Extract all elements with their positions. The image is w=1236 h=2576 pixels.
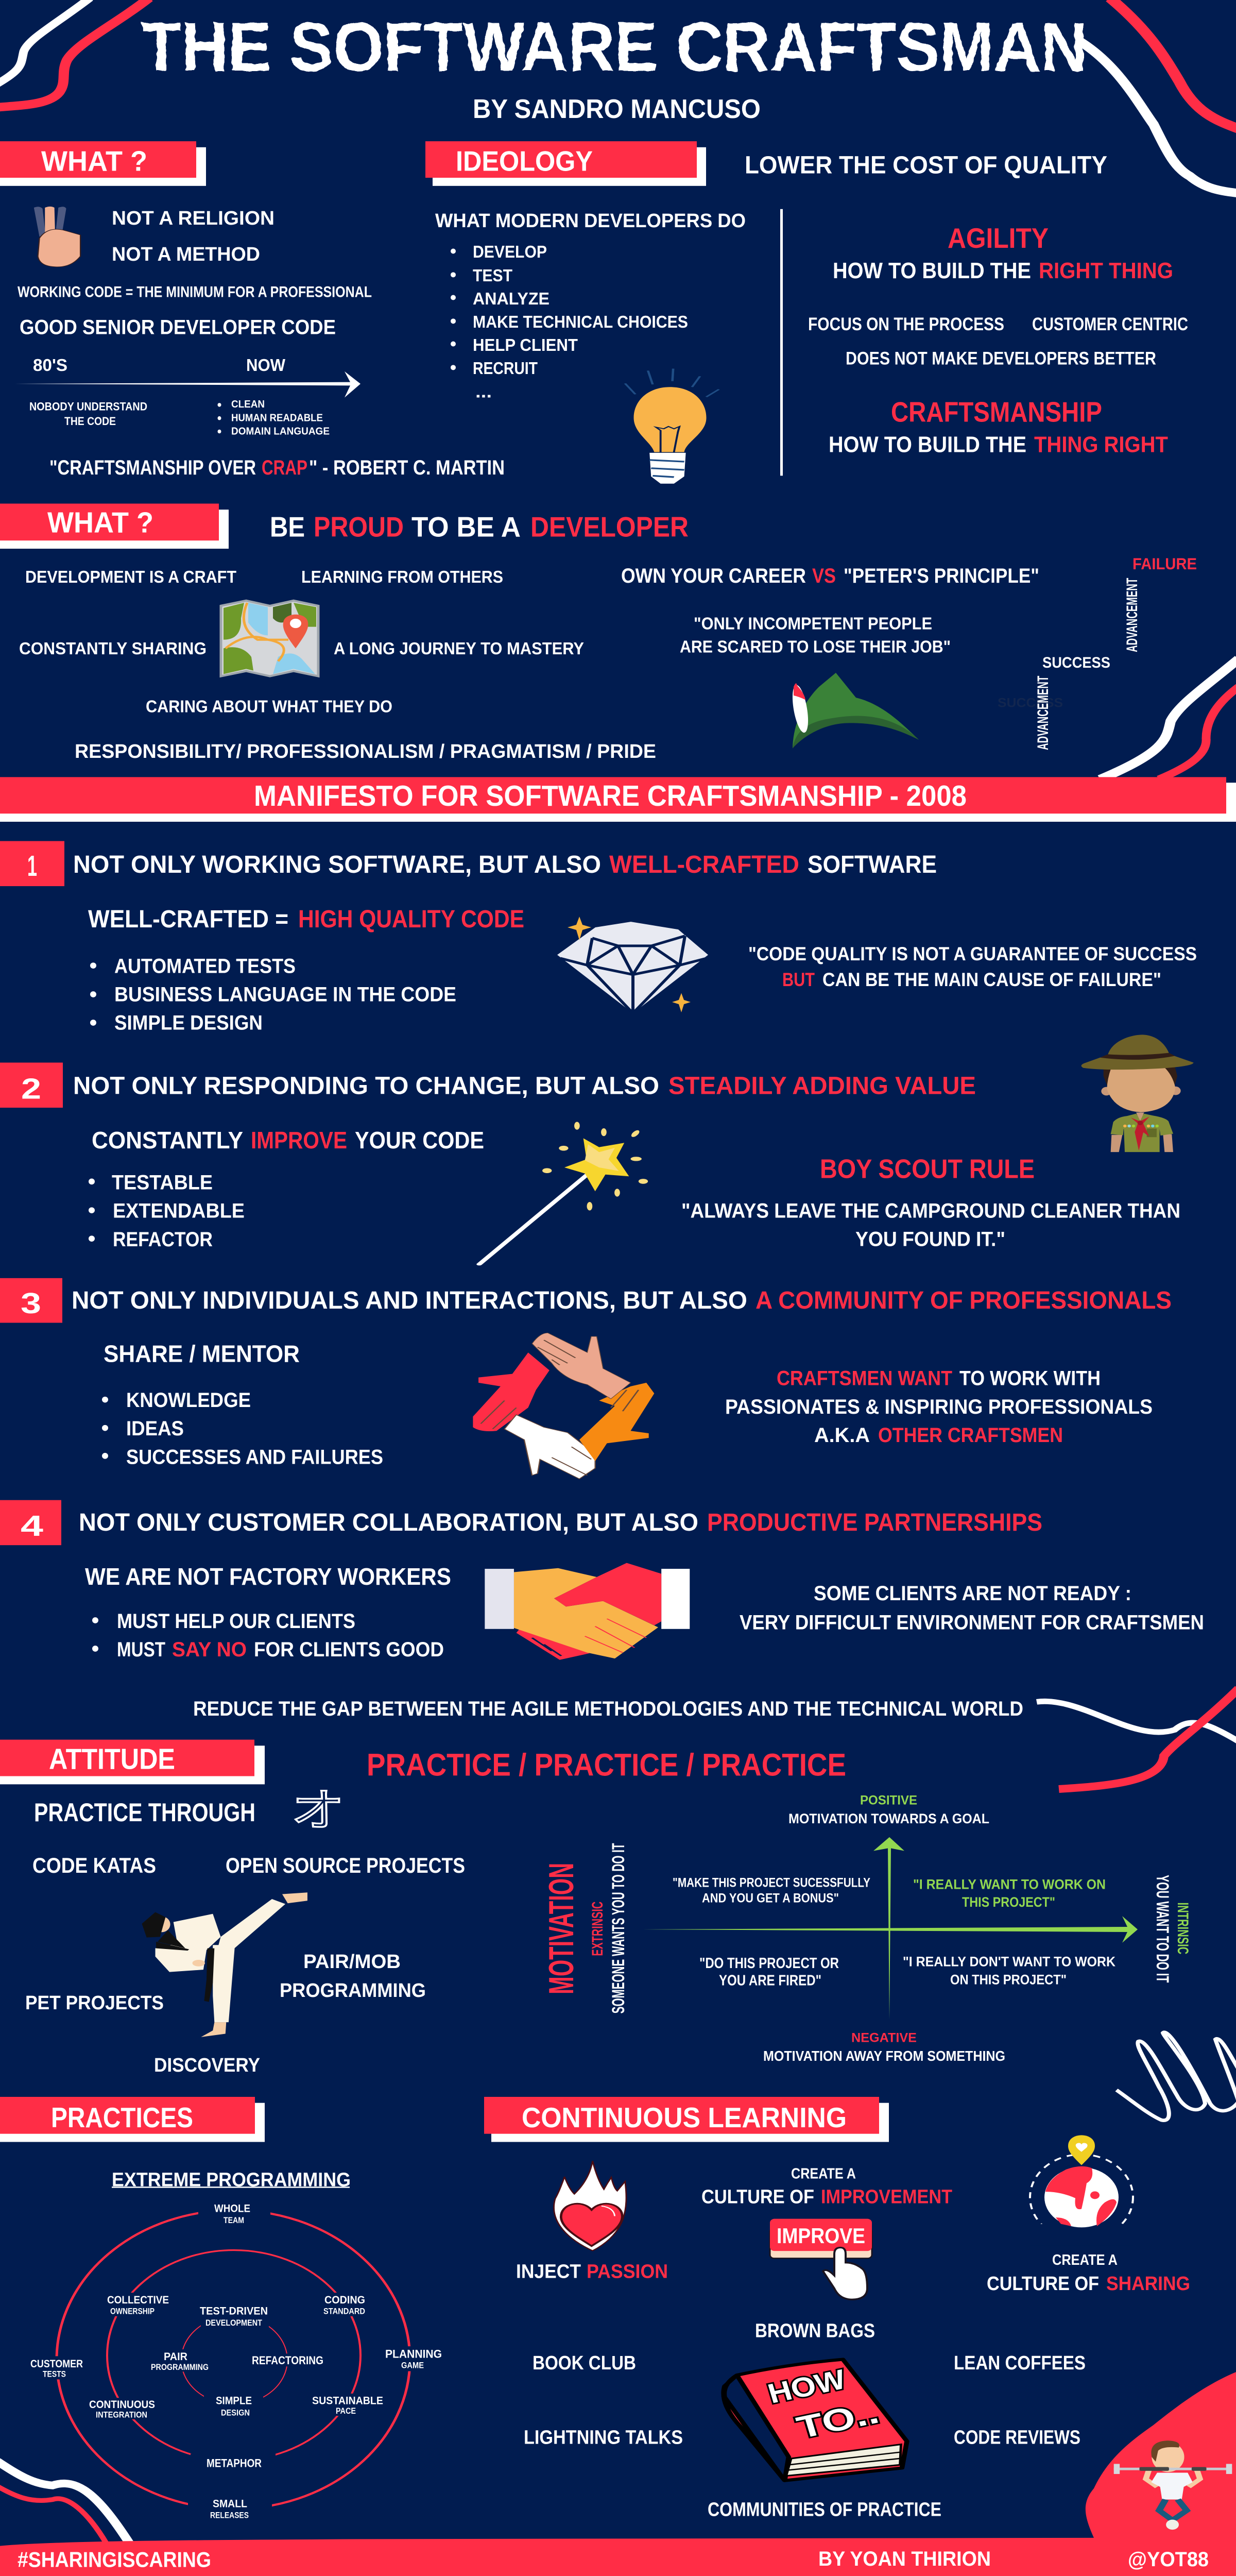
text: handle: @YOT88 bbox=[1128, 2548, 1209, 2571]
text: inject passion bbox=[516, 2260, 668, 2282]
subheading: high quality code: HIGH QUALITY CODE bbox=[298, 905, 524, 933]
quadrant: extrinsic positive: "MAKE THIS PROJECT SUCESSFULLY bbox=[673, 1875, 870, 1890]
label: collective ownership: COLLECTIVE bbox=[107, 2294, 169, 2306]
banner: manifesto: MANIFESTO FOR SOFTWARE CRAFTSMANSHIP - 2008 bbox=[254, 779, 967, 812]
quote: campground: YOU FOUND IT." bbox=[855, 1228, 1005, 1250]
heading: steadily adding value: NOT ONLY RESPONDING TO CHANGE, BUT ALSO bbox=[73, 1072, 659, 1099]
axis label: positive: POSITIVE bbox=[860, 1793, 917, 1807]
section 1 bbox=[0, 841, 1197, 1034]
icon: improve button bbox=[770, 2219, 872, 2299]
text: book club: BOOK CLUB bbox=[533, 2352, 636, 2374]
list: improve bbox=[89, 1171, 245, 1251]
text: working code: WORKING CODE = THE MINIMUM FOR A PROFESSIONAL bbox=[18, 283, 372, 300]
heading: attitude: ATTITUDE bbox=[49, 1743, 175, 1775]
quote: incompetent people: ARE SCARED TO LOSE THEIR JOB" bbox=[680, 637, 951, 656]
text: craftsmen want: TO WORK WITH bbox=[959, 1367, 1101, 1389]
heading: ideology bbox=[425, 141, 706, 186]
text: culture of sharing: CULTURE OF bbox=[987, 2273, 1099, 2294]
rings bbox=[57, 2210, 410, 2509]
heading: well-crafted software: NOT ONLY WORKING SOFTWARE, BUT ALSO bbox=[73, 851, 601, 878]
icon: author avatar bbox=[1114, 2441, 1232, 2530]
section 2 bbox=[0, 1035, 1194, 1264]
label: test-driven development bbox=[200, 2304, 268, 2328]
axis label: negative bbox=[763, 2030, 1005, 2064]
list: developer activities: TEST bbox=[473, 266, 512, 285]
chart: peter's principle: ADVANCEMENT bbox=[1034, 676, 1052, 750]
chart: xp circles bbox=[28, 2200, 443, 2522]
label: sustainable pace: PACE bbox=[336, 2406, 356, 2416]
heading: productive partnerships: PRODUCTIVE PARTNERSHIPS bbox=[707, 1509, 1042, 1536]
heading: be proud to be a developer: DEVELOPER bbox=[530, 511, 689, 543]
text: focus on the process: FOCUS ON THE PROCESS bbox=[808, 314, 1004, 334]
number 3: 3 bbox=[21, 1287, 41, 1320]
list: developer activities: MAKE TECHNICAL CHOICES bbox=[473, 312, 688, 331]
label: coding standard: STANDARD bbox=[323, 2306, 365, 2316]
axis label: negative: MOTIVATION AWAY FROM SOMETHING bbox=[763, 2048, 1005, 2064]
text: open source projects: OPEN SOURCE PROJECTS bbox=[226, 1853, 465, 1877]
icon: katakana o: オ bbox=[291, 1774, 345, 1839]
quote: campground bbox=[681, 1199, 1180, 1250]
label: simple design: SIMPLE bbox=[216, 2395, 252, 2407]
quadrant: extrinsic negative: "DO THIS PROJECT OR bbox=[699, 1955, 839, 1971]
quote: code quality: BUT bbox=[782, 969, 815, 990]
text: craftsmen want: CRAFTSMEN WANT bbox=[777, 1367, 952, 1389]
icon: flaming heart bbox=[554, 2161, 626, 2251]
list: improve: EXTENDABLE bbox=[113, 1199, 245, 1222]
icon: improve button: IMPROVE bbox=[777, 2224, 865, 2248]
label: sustainable pace: SUSTAINABLE bbox=[312, 2395, 383, 2407]
text: culture of improvement: CULTURE OF bbox=[701, 2185, 814, 2208]
label: customer tests: TESTS bbox=[43, 2369, 66, 2379]
timeline: THE CODE bbox=[64, 415, 116, 428]
heading: community of professionals: NOT ONLY INDIVIDUALS AND INTERACTIONS, BUT ALSO bbox=[72, 1286, 747, 1314]
text: author: BY YOAN THIRION bbox=[818, 2548, 991, 2570]
axis labels: intrinsic: YOU WANT TO DO IT bbox=[1153, 1875, 1172, 1982]
panel: be proud bbox=[0, 504, 1197, 762]
icon: peace hand bbox=[34, 207, 80, 267]
chart: peter's principle bbox=[998, 555, 1197, 750]
quadrant: extrinsic negative: YOU ARE FIRED" bbox=[719, 1972, 821, 1989]
list: share: KNOWLEDGE bbox=[126, 1389, 251, 1412]
heading: own your career bbox=[621, 565, 1039, 587]
block: agility: AGILITY bbox=[948, 222, 1049, 254]
text: lightning talks: LIGHTNING TALKS bbox=[524, 2426, 683, 2448]
quadrant: intrinsic positive: "I REALLY WANT TO WORK ON bbox=[913, 1877, 1106, 1892]
subtitle: BY SANDRO MANCUSO bbox=[473, 94, 761, 124]
number 2 bbox=[0, 1062, 63, 1108]
heading: extreme programming: EXTREME PROGRAMMING bbox=[112, 2168, 351, 2190]
text: brown bags: BROWN BAGS bbox=[755, 2319, 875, 2342]
number 4: 4 bbox=[21, 1510, 43, 1543]
chart: peter's principle: SUCCESS bbox=[998, 696, 1063, 710]
text: code reviews: CODE REVIEWS bbox=[954, 2426, 1080, 2448]
block: craftsmanship: HOW TO BUILD THE bbox=[829, 432, 1026, 457]
text: what modern developers do: WHAT MODERN DEVELOPERS DO bbox=[435, 209, 746, 231]
list: developer activities: ANALYZE bbox=[473, 289, 550, 308]
section 3 bbox=[0, 1278, 1172, 1479]
text: inject passion: INJECT bbox=[516, 2260, 581, 2282]
label: coding standard bbox=[323, 2294, 365, 2316]
list: developer activities bbox=[451, 242, 688, 401]
text: some clients: SOME CLIENTS ARE NOT READY : bbox=[814, 1582, 1131, 1605]
label: test-driven development: DEVELOPMENT bbox=[205, 2318, 263, 2328]
list: well-crafted: SIMPLE DESIGN bbox=[114, 1011, 263, 1034]
heading: be proud to be a developer bbox=[270, 511, 689, 543]
quadrant: intrinsic negative: ON THIS PROJECT" bbox=[950, 1972, 1067, 1988]
timeline: CLEAN bbox=[231, 398, 265, 410]
label: small releases bbox=[210, 2498, 249, 2520]
list: improve: TESTABLE bbox=[112, 1171, 213, 1194]
quote: incompetent people: "ONLY INCOMPETENT PEOPLE bbox=[694, 614, 932, 633]
label: simple design bbox=[216, 2395, 252, 2417]
text: communities of practice: COMMUNITIES OF PRACTICE bbox=[708, 2498, 941, 2520]
quadrant: intrinsic negative bbox=[903, 1954, 1115, 1988]
panel: practices bbox=[0, 2097, 443, 2522]
heading: what bbox=[0, 504, 229, 549]
panel: attitude bbox=[0, 1740, 1192, 2076]
number 3 bbox=[0, 1278, 62, 1323]
label: pair programming bbox=[151, 2350, 209, 2372]
subheading: constantly improve: YOUR CODE bbox=[355, 1127, 484, 1154]
list: developer activities: HELP CLIENT bbox=[473, 335, 578, 354]
label: continuous integration: CONTINUOUS bbox=[89, 2398, 155, 2411]
text: not a religion: NOT A RELIGION bbox=[112, 207, 274, 229]
subheading: constantly improve bbox=[92, 1127, 484, 1154]
list: clients bbox=[92, 1610, 444, 1661]
quadrant: extrinsic positive: AND YOU GET A BONUS" bbox=[702, 1891, 839, 1905]
arrow: timeline bbox=[14, 371, 360, 398]
heading: continuous learning bbox=[484, 2097, 889, 2142]
quote: craftsmanship over crap: "CRAFTSMANSHIP OVER bbox=[49, 456, 256, 479]
label: whole team: WHOLE bbox=[214, 2202, 250, 2215]
text: some clients bbox=[740, 1582, 1204, 1634]
text: good senior developer code: GOOD SENIOR DEVELOPER CODE bbox=[20, 316, 336, 338]
label: refactoring: REFACTORING bbox=[252, 2354, 323, 2367]
panel: what bbox=[0, 141, 505, 479]
timeline: NOBODY UNDERSTAND bbox=[29, 401, 147, 413]
heading: be proud to be a developer: PROUD bbox=[314, 511, 404, 543]
label: planning game: GAME bbox=[401, 2360, 424, 2370]
quadrant: intrinsic negative: "I REALLY DON'T WANT TO WORK bbox=[903, 1954, 1115, 1970]
heading: what bbox=[0, 141, 206, 186]
text: craftsmen want bbox=[725, 1367, 1153, 1447]
label: metaphor: METAPHOR bbox=[207, 2457, 262, 2470]
heading: boy scout rule: BOY SCOUT RULE bbox=[820, 1154, 1035, 1184]
icon: karate figure bbox=[142, 1892, 307, 2037]
label: simple design: DESIGN bbox=[221, 2408, 250, 2417]
list: developer activities: ... bbox=[475, 382, 492, 401]
block: agility: HOW TO BUILD THE bbox=[833, 259, 1031, 283]
heading: what: WHAT ? bbox=[47, 506, 153, 539]
heading: practices bbox=[0, 2097, 265, 2142]
list: clients: SAY NO bbox=[172, 1638, 247, 1661]
axis labels: intrinsic bbox=[1153, 1875, 1192, 1982]
subheading: high quality code: WELL-CRAFTED = bbox=[88, 905, 288, 933]
number 4 bbox=[0, 1500, 61, 1545]
label: planning game: PLANNING bbox=[385, 2348, 442, 2361]
text: pair/mob programming: PAIR/MOB bbox=[303, 1951, 401, 1972]
text: development is a craft: DEVELOPMENT IS A CRAFT bbox=[25, 567, 236, 586]
list: well-crafted: AUTOMATED TESTS bbox=[114, 955, 296, 977]
heading: continuous learning: CONTINUOUS LEARNING bbox=[522, 2102, 847, 2133]
block: agility bbox=[833, 222, 1173, 283]
axis labels: extrinsic bbox=[542, 1843, 628, 2013]
quadrant: intrinsic positive: THIS PROJECT" bbox=[962, 1894, 1055, 1910]
icon: diamond bbox=[557, 917, 708, 1013]
list: developer activities: RECRUIT bbox=[473, 359, 538, 378]
icon: globe bbox=[1030, 2135, 1133, 2245]
heading: own your career: "PETER'S PRINCIPLE" bbox=[844, 565, 1039, 587]
list: clients: FOR CLIENTS GOOD bbox=[254, 1638, 444, 1661]
icon: magic wand bbox=[479, 1122, 648, 1264]
icon: how-to book bbox=[724, 2359, 907, 2481]
list: improve: REFACTOR bbox=[113, 1228, 213, 1251]
heading: productive partnerships: NOT ONLY CUSTOMER COLLABORATION, BUT ALSO bbox=[79, 1509, 698, 1536]
text: inject passion: PASSION bbox=[587, 2260, 668, 2282]
heading: own your career: VS bbox=[812, 565, 836, 587]
section 4 bbox=[0, 1500, 1204, 1661]
text: craftsmen want: A.K.A bbox=[814, 1424, 870, 1447]
axis labels: extrinsic: SOMEONE WANTS YOU TO DO IT bbox=[609, 1843, 628, 2013]
timeline: 80'S bbox=[33, 355, 67, 375]
icon: peter pan hat bbox=[789, 673, 919, 748]
axis label: positive bbox=[788, 1793, 989, 1827]
axis labels: intrinsic: INTRINSIC bbox=[1174, 1902, 1192, 1954]
number 2: 2 bbox=[21, 1073, 41, 1105]
subheading: share / mentor: SHARE / MENTOR bbox=[104, 1340, 300, 1367]
block: craftsmanship bbox=[829, 396, 1168, 457]
text: a long journey to mastery: A LONG JOURNEY TO MASTERY bbox=[334, 639, 584, 658]
heading: be proud to be a developer: TO BE A bbox=[411, 511, 521, 543]
list: well-crafted bbox=[90, 955, 456, 1034]
heading: be proud to be a developer: BE bbox=[270, 511, 305, 543]
subheading: factory workers: WE ARE NOT FACTORY WORKERS bbox=[85, 1563, 451, 1590]
text: lean coffees: LEAN COFFEES bbox=[954, 2352, 1086, 2374]
chart: peter's principle: ADVANCEMENT bbox=[1123, 578, 1141, 652]
quadrant: extrinsic positive bbox=[673, 1875, 870, 1905]
heading: practices: PRACTICES bbox=[51, 2102, 193, 2133]
label: customer tests: CUSTOMER bbox=[30, 2358, 83, 2370]
heading: ideology: IDEOLOGY bbox=[456, 145, 593, 177]
timeline bbox=[14, 355, 360, 437]
text: pair/mob programming bbox=[280, 1951, 426, 2001]
quote: craftsmanship over crap: " - ROBERT C. MARTIN bbox=[309, 456, 505, 479]
quote: craftsmanship over crap: CRAP bbox=[262, 456, 307, 479]
timeline: DOMAIN LANGUAGE bbox=[231, 425, 330, 437]
label: small releases: SMALL bbox=[213, 2498, 247, 2510]
quadrant: intrinsic positive bbox=[913, 1877, 1106, 1910]
number 1: 1 bbox=[27, 850, 37, 883]
panel: ideology bbox=[425, 141, 1188, 484]
heading: practice: PRACTICE / PRACTICE / PRACTICE bbox=[367, 1747, 846, 1783]
list: well-crafted: BUSINESS LANGUAGE IN THE CODE bbox=[114, 983, 456, 1006]
heading: own your career: OWN YOUR CAREER bbox=[621, 565, 806, 587]
list: clients: MUST bbox=[117, 1638, 165, 1661]
text: culture of sharing: CREATE A bbox=[1052, 2251, 1118, 2268]
label: collective ownership: OWNERSHIP bbox=[110, 2306, 154, 2316]
axis label: positive: MOTIVATION TOWARDS A GOAL bbox=[788, 1811, 989, 1827]
footer band bbox=[0, 2372, 1236, 2576]
subheading: high quality code bbox=[88, 905, 524, 933]
text: culture of sharing bbox=[987, 2251, 1190, 2294]
timeline: HUMAN READABLE bbox=[231, 412, 323, 423]
text: caring about what they do: CARING ABOUT WHAT THEY DO bbox=[146, 697, 392, 716]
text: code katas: CODE KATAS bbox=[32, 1853, 156, 1877]
heading: steadily adding value: STEADILY ADDING VALUE bbox=[668, 1072, 976, 1099]
label: customer tests bbox=[30, 2358, 83, 2379]
text: learning from others: LEARNING FROM OTHERS bbox=[301, 567, 503, 586]
chart: peter's principle: SUCCESS bbox=[1042, 654, 1110, 671]
text: lower the cost of quality: LOWER THE COST OF QUALITY bbox=[745, 151, 1107, 179]
label: whole team: TEAM bbox=[224, 2215, 244, 2225]
divider bbox=[780, 209, 783, 476]
axis label: negative: NEGATIVE bbox=[851, 2030, 917, 2045]
text: not a method: NOT A METHOD bbox=[112, 243, 260, 265]
quote: incompetent people bbox=[680, 614, 951, 656]
label: pair programming: PAIR bbox=[164, 2350, 187, 2362]
text: practice through: PRACTICE THROUGH bbox=[34, 1798, 255, 1827]
text: pair/mob programming: PROGRAMMING bbox=[280, 1979, 426, 2001]
text: culture of sharing: SHARING bbox=[1106, 2273, 1190, 2294]
panel: continuous learning bbox=[484, 2097, 1232, 2530]
label: continuous integration: INTEGRATION bbox=[96, 2410, 147, 2419]
heading: well-crafted software: SOFTWARE bbox=[808, 851, 937, 878]
icon: handshake bbox=[485, 1563, 690, 1660]
block: craftsmanship: CRAFTSMANSHIP bbox=[891, 396, 1102, 428]
text: values: RESPONSIBILITY/ PROFESSIONALISM / PRAGMATISM / PRIDE bbox=[75, 740, 656, 762]
text: culture of improvement: IMPROVEMENT bbox=[821, 2185, 952, 2208]
icon: light bulb bbox=[625, 369, 719, 484]
quote: code quality bbox=[748, 943, 1197, 990]
icon: scout bbox=[1082, 1035, 1194, 1152]
quote: craftsmanship over crap bbox=[49, 456, 505, 479]
chart: peter's principle: FAILURE bbox=[1132, 555, 1197, 573]
label: small releases: RELEASES bbox=[210, 2510, 249, 2520]
label: whole team bbox=[214, 2202, 250, 2225]
label: pair programming: PROGRAMMING bbox=[151, 2362, 209, 2372]
text: hashtag: #SHARINGISCARING bbox=[18, 2547, 211, 2572]
heading: well-crafted software: WELL-CRAFTED bbox=[609, 851, 799, 878]
axis labels: extrinsic: MOTIVATION bbox=[542, 1863, 581, 1994]
label: coding standard: CODING bbox=[324, 2294, 365, 2306]
label: sustainable pace bbox=[312, 2395, 383, 2416]
icon: how-to book: TO.. bbox=[793, 2395, 883, 2446]
icon: four hands bbox=[473, 1333, 654, 1479]
text: constantly sharing: CONSTANTLY SHARING bbox=[19, 639, 207, 658]
block: craftsmanship: THING RIGHT bbox=[1034, 432, 1168, 457]
icon: map bbox=[221, 601, 318, 676]
chart: motivation quadrant bbox=[542, 1793, 1192, 2064]
axis labels: extrinsic: EXTRINSIC bbox=[589, 1902, 606, 1956]
list: share bbox=[102, 1389, 383, 1469]
subheading: constantly improve: CONSTANTLY bbox=[92, 1127, 243, 1154]
text: discovery: DISCOVERY bbox=[154, 2054, 260, 2076]
text: pet projects: PET PROJECTS bbox=[25, 1992, 164, 2013]
quadrant: extrinsic negative bbox=[699, 1955, 839, 1989]
arrows: axes bbox=[643, 1837, 1138, 2020]
timeline: NOW bbox=[246, 355, 285, 375]
text: culture of improvement bbox=[701, 2165, 952, 2208]
label: planning game bbox=[385, 2348, 442, 2370]
block: agility: RIGHT THING bbox=[1039, 259, 1173, 283]
text: culture of improvement: CREATE A bbox=[791, 2165, 856, 2182]
subheading: constantly improve: IMPROVE bbox=[251, 1127, 347, 1154]
label: continuous integration bbox=[89, 2398, 155, 2419]
number 1 bbox=[0, 841, 64, 886]
list: developer activities: DEVELOP bbox=[473, 242, 547, 261]
label: collective ownership bbox=[107, 2294, 169, 2316]
list: share: IDEAS bbox=[126, 1417, 184, 1440]
heading: attitude bbox=[0, 1740, 265, 1784]
label: test-driven development: TEST-DRIVEN bbox=[200, 2304, 268, 2317]
list: clients: MUST HELP OUR CLIENTS bbox=[117, 1610, 355, 1633]
icon: how-to book: HOW bbox=[764, 2364, 849, 2409]
banner: manifesto bbox=[0, 777, 1236, 822]
text: craftsmen want: OTHER CRAFTSMEN bbox=[878, 1424, 1063, 1447]
heading: what: WHAT ? bbox=[41, 145, 147, 177]
list: share: SUCCESSES AND FAILURES bbox=[126, 1446, 383, 1469]
